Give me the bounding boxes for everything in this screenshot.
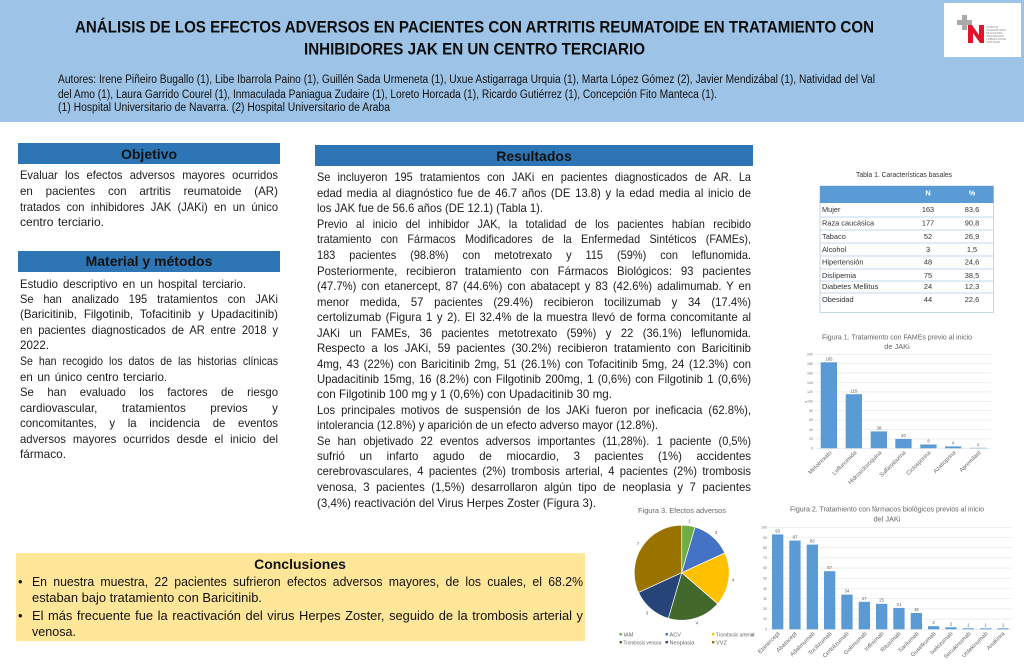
logo: UNIBERTSITATE xyxy=(986,37,1006,41)
chart: figura 2: N xyxy=(751,632,754,637)
resultados text: 183 pacientes (98.8%) con metotrexato y 115 (59%) con leflunomida. xyxy=(317,248,751,262)
logo: UNIVERSITARIO xyxy=(986,28,1006,32)
material y métodos text: Se han recogido los datos de las historias clínicas xyxy=(20,354,278,368)
chart: figura 2: Sarilumab xyxy=(898,631,920,654)
authors and affiliations: Autores: Irene Piñeiro Bugallo (1), Libe Ibarrola Paino (1), Guillén Sada Urmeneta (1), Uxue Astigarraga Urquia (1), Marta López Gómez (2), Javier Mendizábal (1), Natividad del Val xyxy=(58,74,875,86)
chart: figura 1: 140 xyxy=(807,381,813,385)
table: características basales: 26,9 xyxy=(965,232,979,241)
table: características basales: 24,6 xyxy=(965,258,979,266)
chart: figura 2: Anakinra xyxy=(986,631,1007,652)
chart: figura 3 pie: 4 xyxy=(696,620,699,626)
title xyxy=(75,18,874,58)
material y métodos text: Se han analizado 195 tratamientos con JAKi xyxy=(20,292,278,306)
resultados text: Se han objetivado 22 eventos adversos importantes (11,28%). 1 paciente (0,5%) xyxy=(317,434,751,448)
panel: material y métodos xyxy=(18,251,280,461)
authors and affiliations: del Amo (1), Laura Garrido Courel (1), Inmaculada Paniagua Zudaire (1), Loreto Horcada (1), Ricardo Gutiérrez (1), Concepción Fito Manteca (1). xyxy=(58,89,717,101)
resultados text: Se incluyeron 195 tratamientos con JAKi en pacientes diagnosticados de AR. La xyxy=(317,170,751,184)
chart: figura 1: Hidroxicloroquina xyxy=(847,450,884,486)
chart: figura 2: Tocilizumab xyxy=(808,631,833,657)
resultados text: con Filgotinib 100 mg y 1 (0,6%) con Upadacitinib 30 mg. xyxy=(317,387,612,401)
chart: figura 2: 60 xyxy=(763,566,767,570)
table: características basales: 12,3 xyxy=(965,282,979,291)
chart title xyxy=(790,504,984,524)
panel: objetivo xyxy=(18,143,280,229)
legend: Neoplasia xyxy=(670,640,695,646)
resultados text: (3,4%) reactivación del Virus Herpes Zoster (Figura 3). xyxy=(317,496,596,510)
chart: figura 1: 183 xyxy=(826,356,833,362)
legend xyxy=(620,632,754,646)
chart: figura 2: 90 xyxy=(763,536,767,540)
table title: Tabla 1. Características basales xyxy=(856,170,952,179)
chart: figura 1: 1 xyxy=(977,442,980,447)
authors and affiliations xyxy=(58,74,875,114)
conclusiones text: El más frecuente fue la reactivación del virus Herpes Zoster, seguido de la trombosis arterial y xyxy=(32,608,583,623)
chart: figura 2: 2 xyxy=(950,622,953,626)
material y métodos text: concomitantes, y la incidencia de eventos xyxy=(20,416,278,430)
chart: figura 2: 16 xyxy=(914,607,919,612)
chart: figura 1: 200 xyxy=(807,352,813,356)
chart: figura 2: 34 xyxy=(845,588,850,594)
chart: figura 1: 180 xyxy=(807,362,813,366)
material y métodos text: fármaco. xyxy=(20,447,66,461)
resultados text: Upadacitinib 15mg, 16 (8.2%) con Filgotinib 200mg, 1 (0,6%) con Filgotinib 1 (0,6%) xyxy=(317,372,751,386)
chart: figura 2: 83 xyxy=(810,538,815,544)
chart: figura 1: 80 xyxy=(809,409,813,413)
material y métodos text: en pacientes diagnosticados de AR entre 2018 y xyxy=(20,323,278,337)
legend: ACV xyxy=(670,632,681,638)
table: características basales: 1,5 xyxy=(967,245,977,254)
chart title: Figura 3. Efectos adversos xyxy=(638,506,726,515)
chart: figura 3 pie: 3 xyxy=(715,530,718,535)
chart: figura 1 xyxy=(805,332,991,486)
chart: figura 2: 3 xyxy=(932,620,935,625)
chart: figura 1: 40 xyxy=(809,428,813,432)
chart: figura 2 xyxy=(751,504,1012,660)
chart: figura 2: Infliximab xyxy=(864,631,885,653)
resultados text xyxy=(317,170,751,510)
chart: figura 2: Secukinumab xyxy=(943,631,972,660)
legend: IAM xyxy=(624,632,634,638)
table: características basales: Diabetes Mellitus xyxy=(822,282,879,291)
chart: figura 3 pie: 4 xyxy=(732,578,735,582)
resultados text: (47.7%) con etanercept, 87 (44.6%) con abatacept y 83 (42.6%) adalimumab. Y en xyxy=(317,279,751,293)
legend: Trombosis arterial xyxy=(716,632,754,638)
chart: figura 1: 100 xyxy=(807,400,813,404)
table: características basales: Tabaco xyxy=(822,232,846,241)
objetivo text xyxy=(20,168,278,229)
table: características basales: Mujer xyxy=(822,205,841,214)
resultados text: cerebrovasculares, 4 pacientes (2%) trombosis arterial, 4 pacientes (2%) trombosis xyxy=(317,464,751,478)
chart: figura 1: Ciclosporina xyxy=(906,450,933,477)
table: características basales: 24 xyxy=(924,282,932,291)
table: características basales xyxy=(820,170,994,312)
chart: figura 2: 57 xyxy=(827,565,833,570)
conclusiones text xyxy=(18,574,583,639)
table: características basales: 75 xyxy=(924,271,932,280)
material y métodos text: adversos mayores ocurridos desde el inicio del xyxy=(20,432,278,446)
chart: figura 2: 20 xyxy=(763,607,767,611)
table: características basales: 3 xyxy=(926,245,930,254)
chart: figura 1: Metotrexato xyxy=(808,450,833,476)
title: INHIBIDORES JAK EN UN CENTRO TERCIARIO xyxy=(304,40,645,58)
chart title: Figura 1. Tratamiento con FAMEs previo al inicio xyxy=(822,332,972,342)
chart: figura 2: 50 xyxy=(763,576,767,580)
chart: figura 1: n xyxy=(805,399,807,404)
table: características basales: 163 xyxy=(922,205,934,214)
authors and affiliations: (1) Hospital Universitario de Navarra. (2) Hospital Universitario de Araba xyxy=(58,102,391,114)
legend: VVZ xyxy=(716,640,727,646)
chart: figura 1: 20 xyxy=(901,433,906,438)
table: características basales: 83,6 xyxy=(965,205,979,214)
chart: figura 2: Abatacept xyxy=(776,631,799,654)
heading: material y métodos: Material y métodos xyxy=(86,253,213,269)
material y métodos text: cardiovascular, tratamientos previos y xyxy=(20,401,278,415)
objetivo text: centro terciario. xyxy=(20,215,104,229)
resultados text: certolizumab (Figura 1 y 2). El 32.4% de la muestra llevó de forma concomitante al xyxy=(317,310,751,324)
heading: objetivo: Objetivo xyxy=(121,146,177,162)
objetivo text: en pacientes con artritis reumatoide (AR) xyxy=(20,184,278,198)
legend: Trombosis venosa xyxy=(624,640,662,646)
chart: figura 3 pie: 1 xyxy=(688,518,691,524)
heading: material y métodos xyxy=(18,251,280,272)
chart: figura 2: Golimumab xyxy=(843,631,868,656)
bars xyxy=(772,534,1009,629)
table: características basales: Hipertensión xyxy=(822,258,864,266)
resultados text: tratamiento con Fármacos Modificadores de la Enfermedad Sintéticos (FAMEs), xyxy=(317,232,751,246)
material y métodos text: Estudio descriptivo en un hospital terciario. xyxy=(20,277,246,291)
panel: conclusiones xyxy=(16,553,585,641)
table: características basales: 38,5 xyxy=(965,271,979,280)
chart: figura 1: 120 xyxy=(807,390,813,394)
heading: objetivo xyxy=(18,143,280,164)
chart: figura 2: Guselkumab xyxy=(910,631,937,658)
logo: OSPITALEA xyxy=(986,40,1000,44)
table: características basales: % xyxy=(969,188,976,198)
chart: figura 3 pie: 7 xyxy=(637,542,640,546)
chart: figura 1: 60 xyxy=(809,418,813,422)
resultados text: JAKi un FAMEs, 36 pacientes metotrexato (59%) y 22 (36.1%) leflunomida. xyxy=(317,326,751,340)
conclusiones text: estaban bajo tratamiento con Baricitinib. xyxy=(32,590,262,605)
chart: figura 2: 1 xyxy=(967,622,970,628)
heading: resultados: Resultados xyxy=(496,148,572,164)
chart: figura 2: Rituximab xyxy=(880,631,902,654)
table: características basales: 44 xyxy=(924,295,932,304)
table: características basales: Obesidad xyxy=(822,295,854,304)
resultados text: Posteriormente, recibieron tratamiento con Fármacos Biológicos: 93 pacientes xyxy=(317,264,751,278)
resultados text: Los principales motivos de suspensión de los JAKi fueron por ineficacia (62.8%), xyxy=(317,403,751,417)
resultados text: Previo al inicio del inhibidor JAK, la totalidad de los pacientes habían recibido xyxy=(317,217,751,231)
header band xyxy=(0,0,1024,122)
panel: resultados xyxy=(315,145,753,510)
conclusiones text: En nuestra muestra, 22 pacientes sufrieron efectos adversos mayores, de los cuales, el 68.2% xyxy=(32,574,583,589)
chart: figura 2: Adalimumab xyxy=(789,631,816,658)
material y métodos text: (Baricitinib, Filgotinib, Tofacitinib y Upadacitinib) xyxy=(20,307,278,321)
chart: figura 1: Sulfasalazina xyxy=(879,450,908,479)
chart: figura 1: 115 xyxy=(851,388,858,394)
heading: resultados xyxy=(315,145,753,166)
material y métodos text: en un único centro terciario. xyxy=(20,370,167,384)
conclusiones text: • xyxy=(18,608,23,623)
resultados text: los JAK fue de 56.6 años (DE 12.1) (Tabla 1). xyxy=(317,201,543,215)
chart: figura 1: Apremilast xyxy=(959,450,983,474)
chart: figura 3 pie: 3 xyxy=(646,610,649,616)
table: características basales: Alcohol xyxy=(822,245,847,254)
chart: figura 2: 40 xyxy=(763,587,767,591)
chart: figura 2: 1 xyxy=(1002,622,1005,628)
chart: figura 3 pie xyxy=(620,506,754,646)
table: características basales: 177 xyxy=(922,218,934,228)
logo: HOSPITAL xyxy=(986,25,999,29)
chart: figura 2: Ustekinumab xyxy=(961,631,989,659)
resultados text: edad media al diagnóstico fue de 46.7 años (DE 13.8) y la edad media al inicio de xyxy=(317,186,751,200)
resultados text: Respecto a los JAKi, 59 pacientes (30.2%) recibieron tratamiento con Baricitinib xyxy=(317,341,751,355)
chart title: Figura 2. Tratamiento con fármacos biológicos previos al inicio xyxy=(790,504,984,514)
chart title: de JAKi xyxy=(884,342,910,351)
resultados text: venosa, 3 pacientes (1,5%) desarrollaron algún tipo de neoplasia y 7 pacientes xyxy=(317,480,751,494)
resultados text: intolerancia (12.8%) y aparición de un efecto adverso mayor (12.8%). xyxy=(317,418,658,432)
chart: figura 2: Etanercept xyxy=(757,631,782,655)
pie slices xyxy=(634,525,729,620)
chart: figura 2: 87 xyxy=(793,534,798,540)
table: características basales: Dislipemia xyxy=(822,271,857,280)
chart: figura 2: 10 xyxy=(763,617,767,621)
resultados text: sufrió un infarto agudo de miocardio, 3 pacientes (1%) accidentes xyxy=(317,449,751,463)
table: características basales: N xyxy=(925,188,931,198)
conclusiones text: venosa. xyxy=(32,624,76,639)
table: características basales: 22,6 xyxy=(965,295,979,304)
chart: figura 2: 80 xyxy=(763,546,767,550)
chart: figura 2: 100 xyxy=(761,526,767,530)
table: características basales: 90,8 xyxy=(965,218,979,228)
table: características basales: 52 xyxy=(924,232,932,241)
resultados text: 4mg, 43 (22%) con Baricitinib 2mg, 51 (26.1%) con Tofacitinib 5mg, 24 (12.3%) con xyxy=(317,357,751,371)
chart: figura 1: 36 xyxy=(877,426,882,430)
chart title: del JAKi xyxy=(873,514,901,524)
logo: DE NAVARRA xyxy=(986,31,1003,35)
chart: figura 1: 160 xyxy=(807,372,813,376)
chart: figura 2: 30 xyxy=(763,597,767,601)
table: características basales: 48 xyxy=(924,258,932,266)
table: características basales: Raza caucásica xyxy=(822,218,875,228)
chart title xyxy=(822,332,972,351)
chart: figura 2: Certolizumab xyxy=(822,631,850,660)
chart: figura 1: Azatioprina xyxy=(933,450,958,475)
chart: figura 2: 70 xyxy=(763,556,767,560)
material y métodos text: 2022. xyxy=(20,338,49,352)
title: ANÁLISIS DE LOS EFECTOS ADVERSOS EN PACIENTES CON ARTRITIS REUMATOIDE EN TRATAMIENTO CON xyxy=(75,18,874,36)
material y métodos text xyxy=(20,277,278,461)
chart: figura 1: 20 xyxy=(809,437,813,441)
chart: figura 1: 8 xyxy=(927,438,930,444)
chart: figura 1: 4 xyxy=(952,440,955,446)
conclusiones text: • xyxy=(18,574,23,589)
chart: figura 2: 1 xyxy=(984,622,987,628)
chart: figura 1: 0 xyxy=(811,446,813,450)
resultados text: menor medida, 57 pacientes (29.4%) recibieron tocilizumab y 34 (17.4%) xyxy=(317,295,751,309)
chart: figura 2: 27 xyxy=(862,596,867,601)
chart: figura 2: Ixekizumab xyxy=(929,631,954,656)
chart: figura 2: 25 xyxy=(879,598,885,602)
chart: figura 2: 0 xyxy=(765,628,767,632)
heading: conclusiones: Conclusiones xyxy=(254,556,346,572)
objetivo text: Evaluar los efectos adversos mayores ocurridos xyxy=(20,168,278,182)
logo xyxy=(944,3,1021,57)
material y métodos text: Se han evaluado los factores de riesgo xyxy=(20,385,278,399)
chart: figura 1: Leflunomida xyxy=(832,450,859,477)
chart: figura 2: 93 xyxy=(775,528,781,534)
objetivo text: tratados con inhibidores JAK (JAKi) en un único xyxy=(20,200,278,214)
logo: NAFARROAKO xyxy=(986,34,1004,38)
chart: figura 2: 21 xyxy=(897,602,902,607)
bars xyxy=(821,362,986,448)
